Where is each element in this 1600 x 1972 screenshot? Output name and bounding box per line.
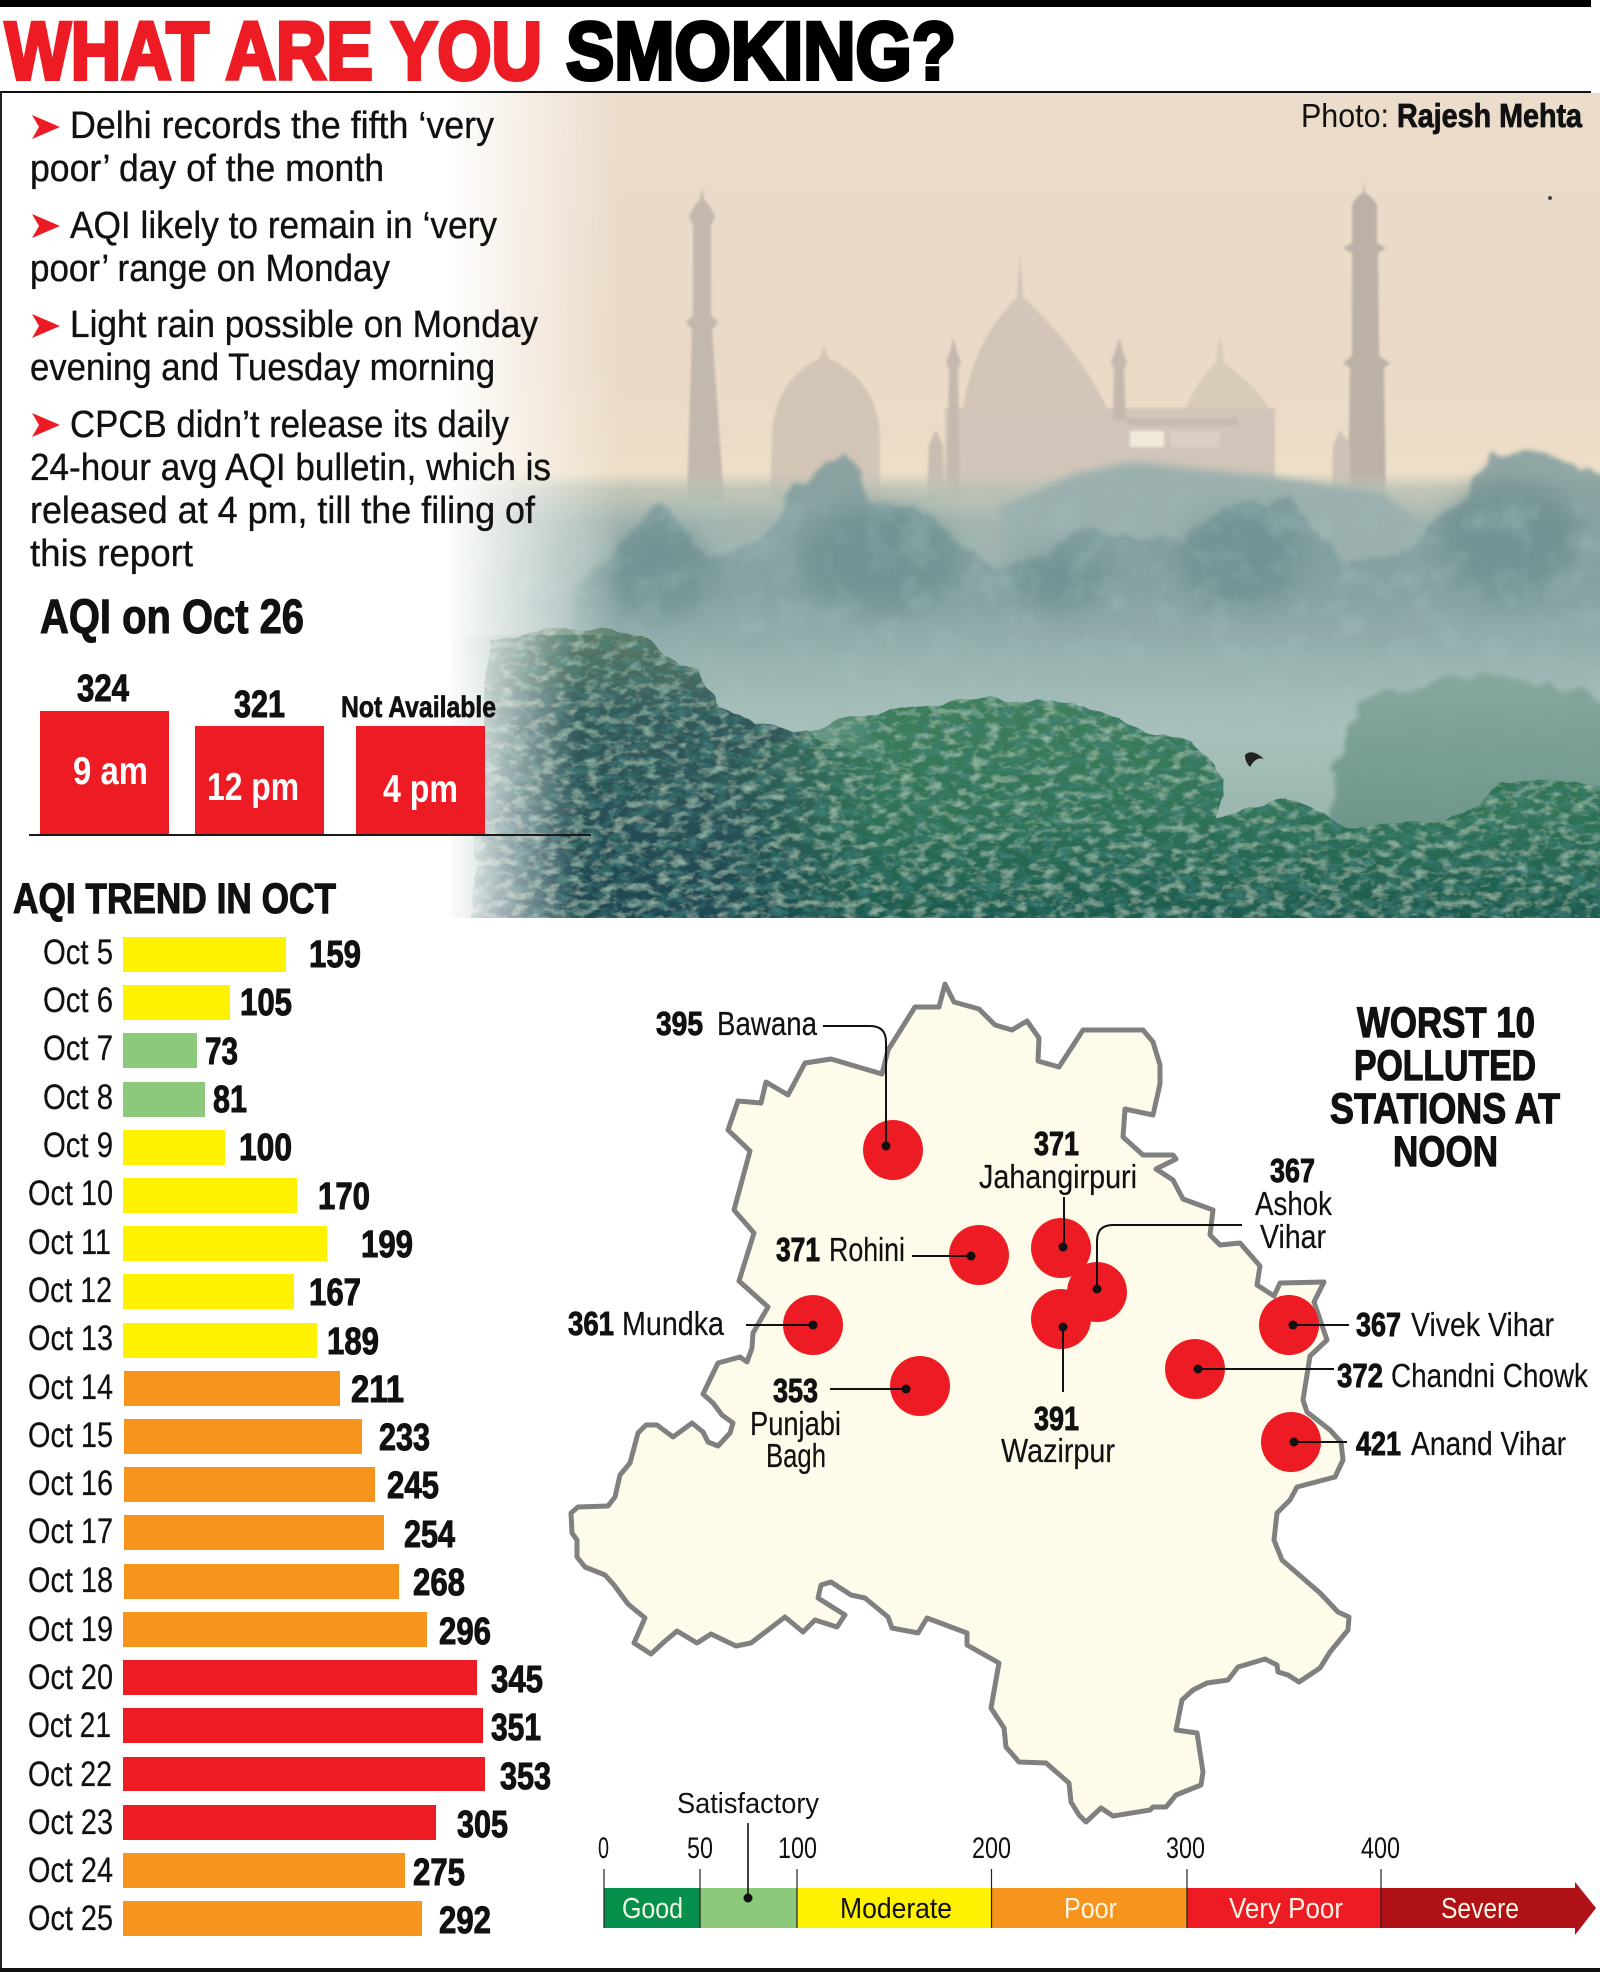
value labels: 245 xyxy=(387,1465,439,1507)
station: Ashok Vihar: Vihar xyxy=(1260,1218,1326,1255)
bar: 9 am: 324 xyxy=(77,668,129,710)
value labels: 167 xyxy=(309,1272,361,1314)
dark blobs inside the misty trees xyxy=(610,480,1580,620)
bullet 4: 24-hour avg AQI bulletin, which is xyxy=(30,447,551,489)
bar: 12 pm: 321 xyxy=(234,684,285,726)
value labels: 100 xyxy=(239,1127,292,1169)
bar: 12 pm: 12 pm xyxy=(207,766,299,809)
date labels: Oct 16 xyxy=(28,1464,113,1503)
value labels: 305 xyxy=(457,1804,508,1846)
value labels: 296 xyxy=(439,1611,491,1653)
legend band labels: Severe xyxy=(1441,1893,1519,1925)
value labels: 159 xyxy=(309,934,361,976)
photo credit xyxy=(1301,97,1583,134)
date labels: Oct 19 xyxy=(28,1610,113,1649)
misty base layer xyxy=(450,472,1600,918)
value labels: 345 xyxy=(491,1659,543,1701)
station: Wazirpur: 391 xyxy=(1034,1400,1079,1437)
station: Rohini: Rohini xyxy=(829,1231,905,1268)
heading: worst 10 polluted stations at noon: STATIONS AT xyxy=(1330,1085,1560,1133)
station: Ashok Vihar: Ashok xyxy=(1255,1185,1332,1222)
date labels: Oct 23 xyxy=(28,1803,113,1842)
station: Bawana: Bawana xyxy=(717,1005,818,1042)
date labels: Oct 18 xyxy=(28,1561,113,1600)
legend band labels: Very Poor xyxy=(1229,1893,1343,1925)
legend band labels xyxy=(622,1893,1519,1925)
legend tick values: 50 xyxy=(687,1832,713,1865)
station: Anand Vihar xyxy=(1261,1412,1566,1472)
far hill under the mosque xyxy=(1000,458,1420,538)
value labels: 275 xyxy=(413,1852,465,1894)
photo: haze-covered mosque and trees xyxy=(450,93,1600,930)
legend tick values: 400 xyxy=(1361,1832,1400,1865)
bullet 1: poor’ day of the month xyxy=(30,148,384,190)
value labels: 268 xyxy=(413,1562,465,1604)
station: Mundka: 361 xyxy=(568,1305,614,1342)
AQI trend in Oct bar chart xyxy=(13,875,551,1942)
station: Mundka xyxy=(568,1295,843,1355)
bar: 9 am xyxy=(40,668,169,834)
date labels xyxy=(28,933,113,1938)
date labels: Oct 17 xyxy=(28,1512,113,1551)
date labels: Oct 7 xyxy=(43,1029,113,1068)
legend tick values: 0 xyxy=(598,1832,609,1865)
station: Ashok Vihar: 367 xyxy=(1270,1152,1315,1189)
date labels: Oct 9 xyxy=(43,1126,113,1165)
date labels: Oct 10 xyxy=(28,1174,113,1213)
bullet 2: poor’ range on Monday xyxy=(30,248,390,290)
station: Punjabi Bagh: Bagh xyxy=(766,1437,826,1474)
value labels: 211 xyxy=(351,1369,404,1411)
station: Wazirpur: Wazirpur xyxy=(1001,1432,1115,1469)
foreground canopy xyxy=(758,696,1600,918)
bullet 3 xyxy=(30,304,538,389)
value labels: 81 xyxy=(213,1079,247,1121)
heading: AQI on Oct 26: AQI on Oct 26 xyxy=(40,591,304,644)
value labels: 254 xyxy=(404,1514,455,1556)
title: WHAT ARE YOU xyxy=(5,6,542,97)
heading: worst 10 polluted stations at noon: NOON xyxy=(1393,1128,1498,1176)
station: Wazirpur xyxy=(1001,1289,1115,1469)
station: Chandni Chowk: 372 xyxy=(1337,1357,1383,1394)
date labels: Oct 21 xyxy=(28,1706,111,1745)
mottled mist texture xyxy=(609,504,1600,630)
bar: 4 pm: Not Available xyxy=(341,691,496,724)
station: Punjabi Bagh xyxy=(750,1356,950,1474)
top rule xyxy=(0,0,1591,7)
hazy tree on the right xyxy=(1327,672,1600,829)
bullet 3: Light rain possible on Monday xyxy=(70,304,538,346)
station: Rohini xyxy=(776,1225,1009,1285)
value labels: 189 xyxy=(327,1321,379,1363)
legend bands xyxy=(604,1882,1596,1935)
value labels: 292 xyxy=(439,1900,491,1942)
value labels: 353 xyxy=(500,1756,551,1798)
station: Vivek Vihar xyxy=(1259,1295,1554,1355)
legend band labels: Moderate xyxy=(840,1893,952,1925)
bar: 4 pm: 4 pm xyxy=(383,768,458,811)
legend tick values: 100 xyxy=(778,1832,817,1865)
station: Punjabi Bagh: Punjabi xyxy=(750,1405,841,1442)
station: Jahangirpuri: Jahangirpuri xyxy=(979,1158,1137,1195)
legend band labels: Poor xyxy=(1064,1893,1117,1925)
satisfactory callout xyxy=(677,1788,819,1902)
bars xyxy=(123,937,485,1936)
date labels: Oct 13 xyxy=(28,1319,113,1358)
mosque silhouette xyxy=(686,180,1390,500)
bar: 12 pm xyxy=(195,684,324,834)
station: Jahangirpuri: 371 xyxy=(1034,1125,1079,1162)
value labels: 73 xyxy=(205,1031,238,1073)
bullet 4 xyxy=(30,404,551,575)
title: SMOKING? xyxy=(566,6,956,97)
bullet 1 xyxy=(30,105,494,190)
heading: worst 10 polluted stations at noon xyxy=(1330,999,1560,1176)
date labels: Oct 6 xyxy=(43,981,113,1020)
station: Anand Vihar: 421 xyxy=(1356,1425,1401,1462)
legend tick values: 300 xyxy=(1166,1832,1205,1865)
value labels xyxy=(205,934,551,1942)
bar: 9 am: 9 am xyxy=(73,750,148,793)
dark tree at the left xyxy=(470,628,870,918)
value labels: 105 xyxy=(240,982,292,1024)
value labels: 351 xyxy=(491,1707,541,1749)
station markers and labels xyxy=(568,1005,1588,1474)
bullet 4: this report xyxy=(30,533,193,575)
date labels: Oct 11 xyxy=(28,1223,111,1262)
value labels: 199 xyxy=(361,1224,413,1266)
photo fade to white xyxy=(445,93,620,918)
bullet 1: Delhi records the fifth ‘very xyxy=(70,105,494,147)
bullet 3: evening and Tuesday morning xyxy=(30,347,495,389)
legend tick values: 200 xyxy=(972,1832,1011,1865)
date labels: Oct 14 xyxy=(28,1368,113,1407)
value labels: 233 xyxy=(379,1417,430,1459)
bullet 2 xyxy=(30,205,497,290)
station: Vivek Vihar: 367 xyxy=(1356,1306,1401,1343)
station: Ashok Vihar xyxy=(1067,1152,1332,1322)
station: Bawana xyxy=(656,1005,923,1180)
heading: AQI trend in Oct: AQI TREND IN OCT xyxy=(13,875,336,923)
date labels: Oct 5 xyxy=(43,933,113,972)
bird xyxy=(1245,752,1264,767)
value labels: 170 xyxy=(318,1176,370,1218)
photo credit: Photo: xyxy=(1301,97,1389,134)
date labels: Oct 20 xyxy=(28,1658,113,1697)
satisfactory callout: Satisfactory xyxy=(677,1788,819,1820)
station: Punjabi Bagh: 353 xyxy=(773,1372,818,1409)
legend band labels: Good xyxy=(622,1893,683,1925)
midground misty trees xyxy=(574,447,1600,666)
bullet 4: CPCB didn’t release its daily xyxy=(70,404,509,446)
station: Chandni Chowk xyxy=(1165,1339,1588,1399)
station: Rohini: 371 xyxy=(776,1231,820,1268)
date labels: Oct 24 xyxy=(28,1851,113,1890)
date labels: Oct 25 xyxy=(28,1899,113,1938)
AQI on Oct 26 chart xyxy=(29,591,591,836)
station: Mundka: Mundka xyxy=(622,1305,725,1342)
bullet 2: AQI likely to remain in ‘very xyxy=(70,205,497,247)
legend tick values xyxy=(598,1832,1400,1865)
title xyxy=(5,6,956,97)
map of Delhi xyxy=(571,984,1349,1822)
bar: 4 pm xyxy=(341,691,496,834)
date labels: Oct 15 xyxy=(28,1416,113,1455)
bullet list xyxy=(30,105,551,575)
AQI scale legend xyxy=(598,1788,1596,1935)
date labels: Oct 22 xyxy=(28,1755,112,1794)
station: Vivek Vihar: Vivek Vihar xyxy=(1411,1306,1554,1343)
date labels: Oct 12 xyxy=(28,1271,112,1310)
station: Bawana: 395 xyxy=(656,1005,703,1042)
bullet 4: released at 4 pm, till the filing of xyxy=(30,490,535,532)
station: Anand Vihar: Anand Vihar xyxy=(1411,1425,1566,1462)
heading: worst 10 polluted stations at noon: WORST 10 xyxy=(1357,999,1535,1047)
date labels: Oct 8 xyxy=(43,1078,113,1117)
heading: worst 10 polluted stations at noon: POLLUTED xyxy=(1354,1042,1536,1090)
station: Jahangirpuri xyxy=(979,1125,1137,1278)
